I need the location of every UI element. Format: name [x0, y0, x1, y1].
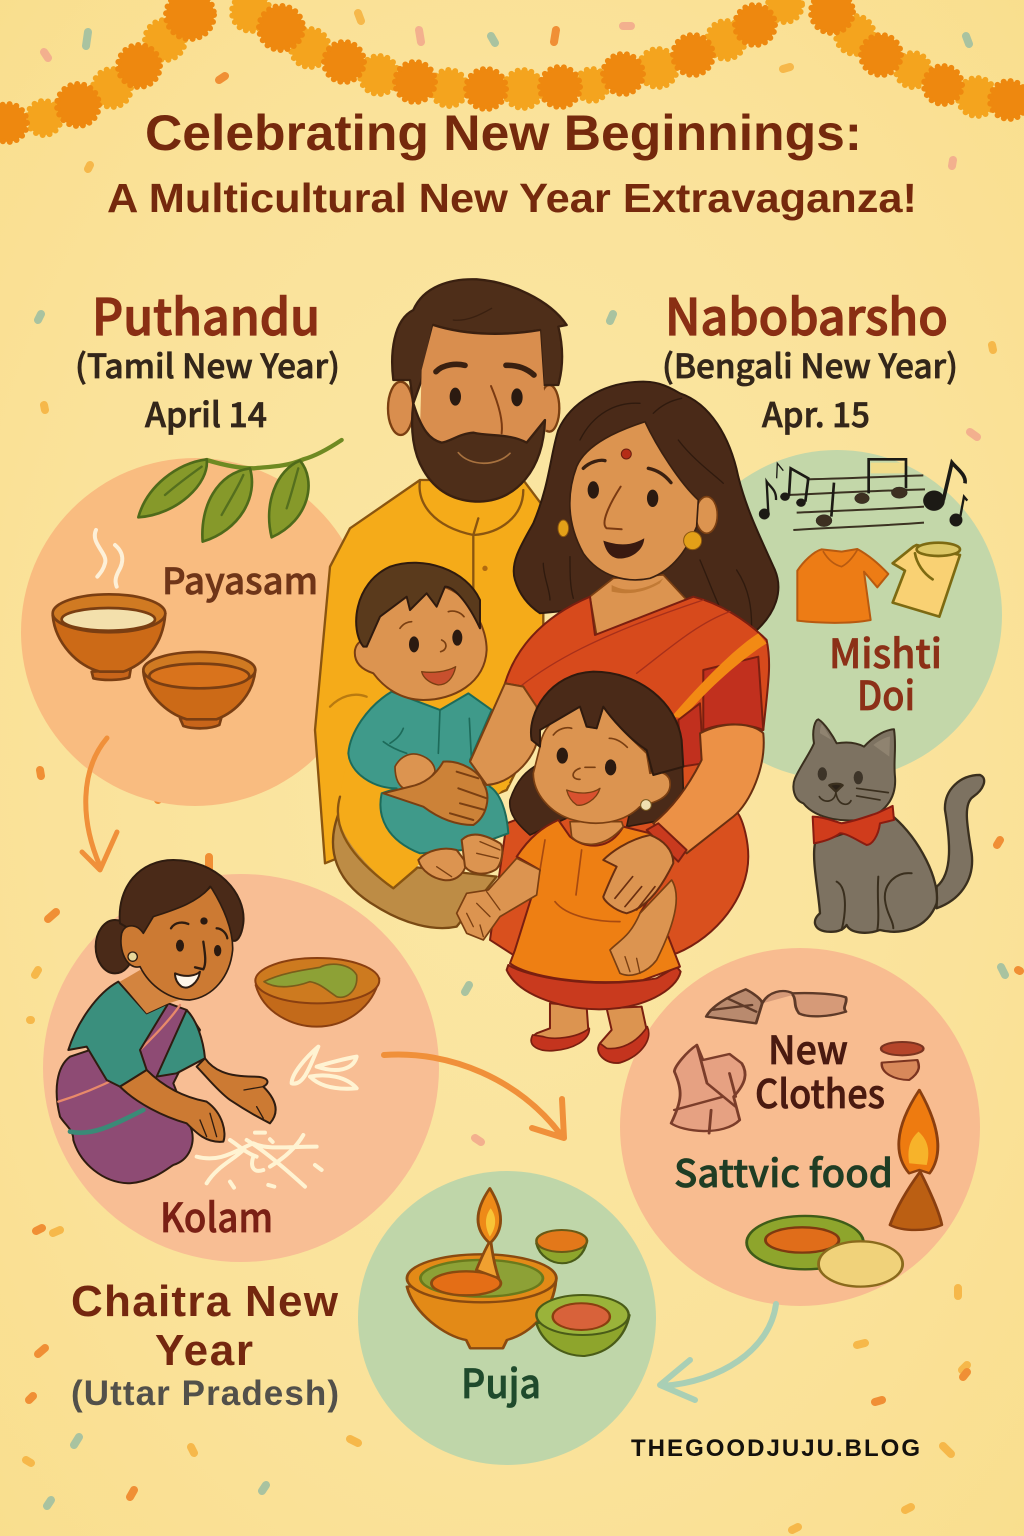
text block: Chaitra New Year [71, 1277, 339, 1413]
title [107, 105, 917, 221]
panel: Puja circle [358, 1171, 656, 1465]
label: Kolam: Kolam [160, 1186, 273, 1244]
icon: cat [793, 719, 984, 933]
marigold garlands [0, 0, 1024, 142]
text block: Puthandu: April 14 [145, 388, 267, 437]
credit: blog name: THEGOODJUJU.BLOG [631, 1435, 920, 1462]
label: New Clothes: Clothes [755, 1064, 885, 1120]
text block: Chaitra New Year: Year [155, 1326, 253, 1375]
panel: Payasam circle [21, 440, 369, 806]
icon: diya bowl [407, 1188, 556, 1348]
label: Mishti Doi: Doi [857, 664, 915, 722]
icon: green-leaf bowl [255, 958, 379, 1027]
text block: Puthandu [75, 278, 340, 437]
label: Mishti Doi [829, 622, 942, 722]
icon: woman drawing kolam [57, 860, 276, 1183]
label: Sattvic food: Sattvic food [674, 1143, 893, 1198]
icon: folded cloth top [706, 989, 846, 1023]
figure: mother [514, 382, 778, 635]
arrow: kolam to sattvic [384, 1054, 564, 1138]
text block: Nabobarsho: Apr. 15 [762, 388, 870, 437]
icon: music notes [759, 459, 967, 530]
icon: small cup [536, 1230, 587, 1263]
icon: folded garment [671, 1045, 745, 1133]
figure: girl [457, 672, 683, 1063]
figure: hands over boy [383, 683, 537, 880]
figure: boy [348, 563, 508, 853]
icon: orange shirt [797, 549, 888, 623]
text block: Puthandu: Puthandu [92, 278, 320, 350]
title: A Multicultural New Year Extravaganza! [107, 175, 917, 221]
icon: small stack [881, 1042, 923, 1080]
text block: Nabobarsho: (Bengali New Year) [662, 340, 958, 388]
icon: side bowl [536, 1295, 629, 1356]
figure: mother saree [490, 597, 769, 955]
label: New Clothes: New [768, 1020, 848, 1076]
figure: mother arm around girl [603, 725, 764, 913]
icon: lamp [890, 1090, 942, 1230]
text block: Nabobarsho: Nabobarsho [665, 278, 948, 350]
figure: father head [388, 279, 567, 502]
panel: Mishti Doi circle [672, 450, 1002, 780]
figure: father body [315, 480, 543, 928]
text block: Chaitra New Year: Chaitra New [71, 1277, 339, 1326]
panel: Kolam circle [43, 860, 439, 1262]
text block: Nabobarsho [662, 278, 958, 437]
panel: New Clothes and Sattvic food circle [620, 948, 980, 1306]
arrow: sattvic to puja [660, 1304, 776, 1400]
icon: bowl [143, 652, 255, 728]
title: Celebrating New Beginnings: [145, 105, 862, 161]
text block: Puthandu: (Tamil New Year) [75, 340, 340, 388]
icon: yellow shirt [893, 543, 960, 617]
text block: Chaitra New Year: (Uttar Pradesh) [71, 1374, 339, 1413]
illustration: family [315, 279, 778, 1063]
icon: steam [95, 530, 122, 587]
label: New Clothes [755, 1020, 885, 1120]
label: Mishti Doi: Mishti [829, 622, 942, 680]
icon: food plate [747, 1216, 903, 1287]
icon: leaf branch [138, 440, 342, 542]
label: Payasam: Payasam [162, 553, 318, 605]
icon: bowl [53, 594, 165, 680]
icon: kolam pattern [197, 1047, 357, 1188]
label: Puja: Puja [461, 1352, 541, 1410]
arrow: payasam to kolam [82, 738, 117, 870]
